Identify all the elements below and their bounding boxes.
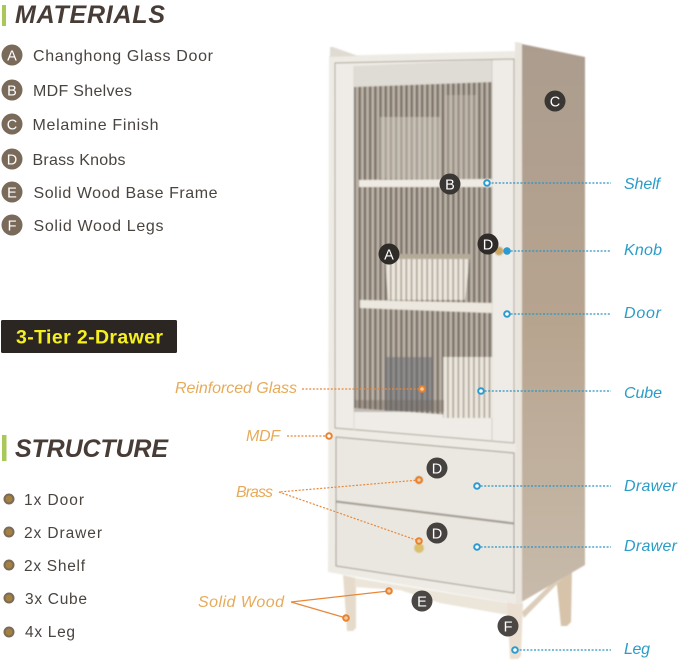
marker B xyxy=(440,174,460,194)
item B: B xyxy=(7,84,17,100)
item D: D xyxy=(7,152,17,168)
callout: MDF xyxy=(246,428,332,445)
callout: Shelf: Shelf xyxy=(624,176,662,193)
item E xyxy=(2,182,218,202)
callout: Cube xyxy=(478,385,662,402)
marker D knob xyxy=(478,234,498,254)
callout: Leg xyxy=(512,641,650,658)
item F: Solid Wood Legs xyxy=(34,218,164,235)
callout: Drawer 2 xyxy=(474,538,678,555)
shelves xyxy=(359,179,492,187)
callout: Knob: Knob xyxy=(624,242,662,259)
marker D drawer 2 xyxy=(426,522,448,544)
marker B: B xyxy=(445,178,455,194)
heading: structure: STRUCTURE xyxy=(15,435,169,463)
badge: 3-Tier 2-Drawer: 3-Tier 2-Drawer xyxy=(16,326,163,348)
item C: Melamine Finish xyxy=(32,117,158,134)
item C xyxy=(2,114,158,134)
marker D drawer 1: D xyxy=(432,462,442,478)
callout: Brass: Brass xyxy=(236,484,273,501)
side panel xyxy=(517,43,585,604)
callout: MDF: MDF xyxy=(246,428,281,445)
heading: materials: MATERIALS xyxy=(15,1,165,29)
item B xyxy=(2,80,132,100)
item A: A xyxy=(7,48,17,64)
front carcass xyxy=(328,51,516,604)
marker F: F xyxy=(504,620,513,636)
item E: Solid Wood Base Frame xyxy=(34,185,218,202)
front right leg xyxy=(507,600,523,659)
item F xyxy=(2,214,164,236)
callout: Door: Door xyxy=(624,305,662,322)
item D: Brass Knobs xyxy=(32,152,126,169)
item D xyxy=(2,148,126,170)
back leg xyxy=(556,570,572,626)
knobs xyxy=(494,246,504,256)
callout: Solid Wood xyxy=(198,588,392,621)
structure list xyxy=(4,492,102,641)
fluted glass xyxy=(354,82,492,418)
drawers xyxy=(336,437,514,523)
marker C xyxy=(544,90,566,112)
item cube: 3x Cube xyxy=(25,591,87,608)
badge: 3-Tier 2-Drawer xyxy=(1,320,177,353)
item shelf: 2x Shelf xyxy=(24,558,86,575)
callout: Drawer 2: Drawer xyxy=(624,538,678,555)
marker E: E xyxy=(417,594,427,610)
callout: Solid Wood: Solid Wood xyxy=(198,594,285,611)
callout: Drawer 1: Drawer xyxy=(624,478,678,495)
item C: C xyxy=(7,118,17,134)
marker A: A xyxy=(384,248,394,264)
item drawer: 2x Drawer xyxy=(24,525,102,542)
glass contents xyxy=(380,117,440,179)
callout: Knob xyxy=(504,242,662,259)
callout: Drawer 1 xyxy=(474,478,678,495)
marker C: C xyxy=(550,94,560,110)
materials list xyxy=(2,44,218,236)
item door: 1x Door xyxy=(24,492,84,509)
marker F xyxy=(498,616,518,636)
front left leg xyxy=(343,575,356,631)
marker A xyxy=(378,244,400,264)
callout: Door xyxy=(504,305,662,322)
marker E xyxy=(412,590,432,612)
callout: Cube: Cube xyxy=(624,385,662,402)
cabinet illustration xyxy=(328,42,585,659)
item leg: 4x Leg xyxy=(25,624,75,641)
item E: E xyxy=(7,186,17,202)
callout: Shelf xyxy=(484,176,662,193)
item A: Changhong Glass Door xyxy=(33,48,214,65)
callout: Reinforced Glass: Reinforced Glass xyxy=(175,380,297,397)
item B: MDF Shelves xyxy=(33,83,132,100)
base frame xyxy=(355,578,508,615)
marker D drawer 2: D xyxy=(432,526,442,542)
callout: Brass xyxy=(236,477,422,544)
item A xyxy=(2,44,214,66)
item F: F xyxy=(8,218,17,234)
callout: Leg: Leg xyxy=(624,641,650,658)
callout: Reinforced Glass xyxy=(175,380,425,397)
marker D drawer 1 xyxy=(426,458,448,478)
marker D knob: D xyxy=(483,238,493,254)
